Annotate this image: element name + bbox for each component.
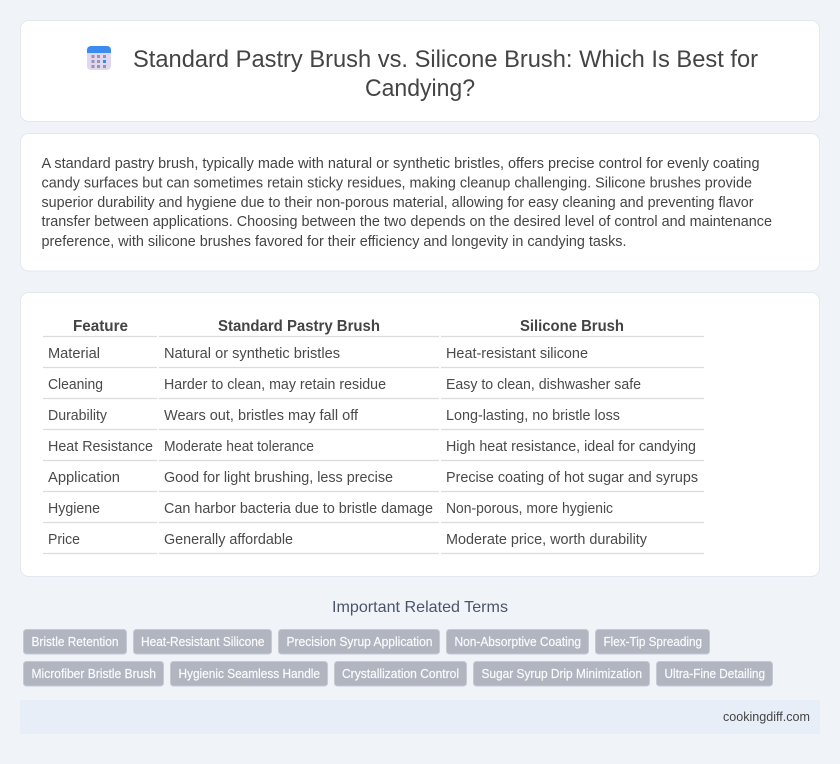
table header: Feature — [73, 318, 128, 335]
tag: Crystallization Control — [342, 667, 459, 681]
tag: Sugar Syrup Drip Minimization — [482, 667, 642, 681]
tag: Heat-Resistant Silicone — [141, 635, 265, 649]
row: durability — [48, 408, 620, 424]
panel: summary text — [20, 134, 820, 271]
icon: calendar — [87, 46, 111, 70]
table header — [73, 318, 624, 335]
tag: Hygienic Seamless Handle — [178, 667, 320, 681]
row: heat resistance: Heat Resistance — [48, 439, 153, 455]
tag: Precision Syrup Application — [286, 635, 433, 649]
tag: Non-Absorptive Coating — [454, 635, 581, 649]
tag — [474, 662, 650, 686]
row: application: Good for light brushing, less precise — [164, 470, 393, 486]
tag — [656, 662, 772, 686]
row: hygiene: Can harbor bacteria due to bristle damage — [164, 501, 433, 517]
row: price: Moderate price, worth durability — [446, 532, 648, 548]
row: cleaning — [48, 377, 641, 393]
row: price — [48, 532, 648, 548]
row: hygiene: Hygiene — [48, 501, 100, 517]
row: application: Precise coating of hot sugar and syrups — [446, 470, 698, 486]
tag: Microfiber Bristle Brush — [32, 667, 156, 681]
row: heat resistance — [48, 439, 696, 455]
row: price: Generally affordable — [164, 532, 293, 548]
tag list — [24, 630, 772, 686]
row: durability: Wears out, bristles may fall off — [164, 408, 359, 424]
summary paragraph — [42, 156, 772, 250]
row: material: Material — [48, 346, 100, 362]
row: cleaning: Harder to clean, may retain residue — [164, 377, 386, 393]
summary paragraph: transfer between applications. Choosing between the two depends on the desired level of control and maintenance — [42, 214, 772, 230]
row: price: Price — [48, 532, 80, 548]
footer: cookingdiff.com — [723, 709, 810, 724]
panel: comparison table — [20, 292, 820, 576]
summary paragraph: superior durability and hygiene due to their non-porous material, allowing for easy cleaning and preventing flavor — [42, 195, 754, 211]
row: cleaning: Easy to clean, dishwasher safe — [446, 377, 641, 393]
table header: Standard Pastry Brush — [218, 318, 380, 335]
row: durability: Long-lasting, no bristle loss — [446, 408, 620, 424]
row: hygiene — [48, 501, 613, 517]
tag — [446, 630, 588, 654]
tag — [24, 630, 126, 654]
row: application: Application — [48, 470, 120, 486]
title: Standard Pastry Brush vs. Silicone Brush: Which Is Best for — [133, 46, 758, 73]
summary paragraph: preference, with silicone brushes favored for their efficiency and longevity in candying tasks. — [42, 234, 626, 250]
table header: Silicone Brush — [520, 318, 624, 335]
row: material: Natural or synthetic bristles — [164, 346, 340, 362]
panel: title card — [20, 20, 820, 122]
heading: important related terms: Important Related Terms — [332, 599, 508, 616]
row: material — [48, 346, 588, 362]
tag: Bristle Retention — [32, 635, 119, 649]
tag — [24, 662, 164, 686]
tag — [278, 630, 440, 654]
summary paragraph: candy surfaces but can sometimes retain sticky residues, making cleanup challenging. Silicone brushes provide — [42, 176, 752, 192]
row: heat resistance: Moderate heat tolerance — [164, 439, 314, 455]
tag — [334, 662, 466, 686]
row: heat resistance: High heat resistance, ideal for candying — [446, 439, 696, 455]
tag: Ultra-Fine Detailing — [664, 667, 765, 681]
footer — [20, 700, 820, 734]
title: Candying? — [365, 75, 475, 102]
row: material: Heat-resistant silicone — [446, 346, 588, 362]
tag — [596, 630, 710, 654]
title — [133, 46, 758, 102]
row: hygiene: Non-porous, more hygienic — [446, 501, 613, 517]
row: durability: Durability — [48, 408, 108, 424]
row: application — [48, 470, 698, 486]
tag: Flex-Tip Spreading — [604, 635, 702, 649]
tag — [134, 630, 272, 654]
tag — [170, 662, 328, 686]
summary paragraph: A standard pastry brush, typically made with natural or synthetic bristles, offers precise control for evenly coating — [42, 156, 760, 172]
row: cleaning: Cleaning — [48, 377, 103, 393]
